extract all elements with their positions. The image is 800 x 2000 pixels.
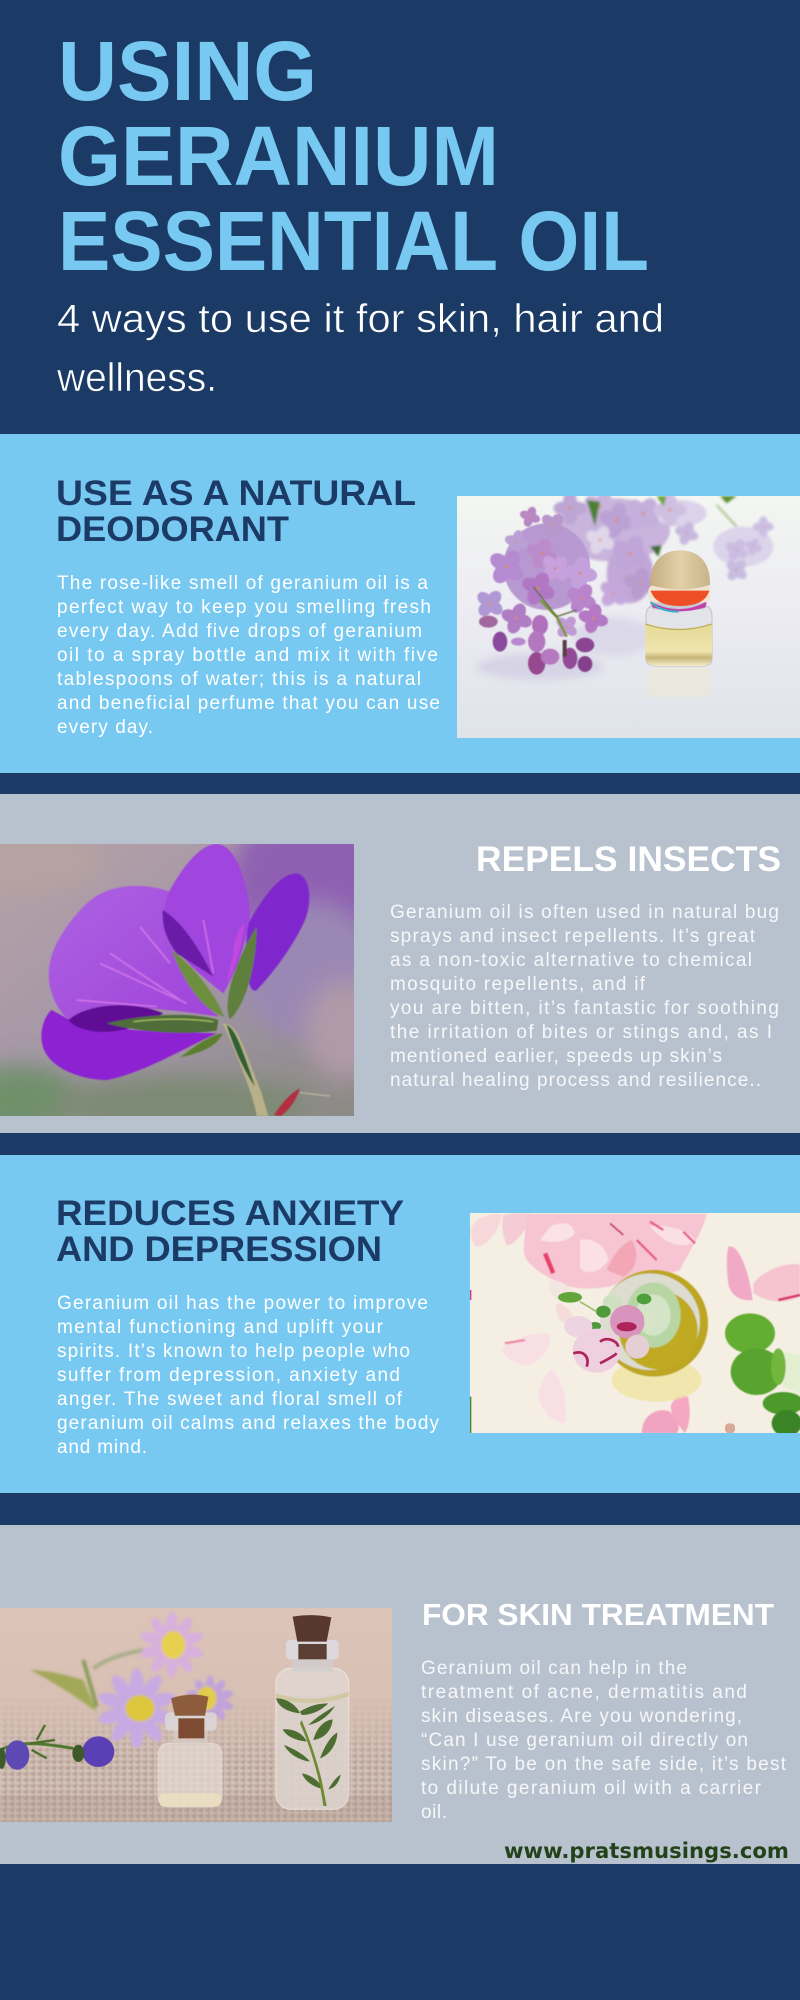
- text block: skin body: Geranium oil can help in the: [421, 1658, 687, 1679]
- text block: deodorant body: perfect way to keep you smelling fresh: [57, 597, 431, 618]
- icon: large bottle with herb: [276, 1615, 349, 1809]
- title: [58, 24, 649, 288]
- heading: for skin treatment: FOR SKIN TREATMENT: [422, 1597, 774, 1632]
- text block: insects body: the irritation of bites or stings and, as I: [390, 1022, 772, 1043]
- title: USING: [58, 24, 317, 118]
- heading: use as a natural deodorant: USE AS A NATURAL: [56, 474, 416, 513]
- text block: deodorant body: The rose-like smell of geranium oil is a: [57, 573, 428, 594]
- panel: for skin treatment: [0, 1525, 800, 1864]
- text block: skin body: skin diseases. Are you wondering,: [421, 1706, 742, 1727]
- heading: use as a natural deodorant: DEODORANT: [56, 510, 289, 549]
- text block: skin body: skin?” To be on the safe side, it’s best: [421, 1754, 787, 1775]
- title block: [56, 24, 664, 400]
- icon: oil bottle: [645, 550, 712, 697]
- text block: insects body: sprays and insect repellents. It’s great: [390, 926, 756, 947]
- title: GERANIUM: [58, 109, 499, 203]
- photo: lilac and oil bottle: [457, 484, 800, 738]
- text block: insects body: mentioned earlier, speeds up skin’s: [390, 1046, 722, 1067]
- text block: insects body: natural healing process and resilience..: [390, 1070, 761, 1091]
- photo: pink petals and oil jar: [470, 1213, 800, 1437]
- text block: insects body: as a non-toxic alternative to chemical: [390, 950, 752, 971]
- text block: anxiety body: anger. The sweet and floral smell of: [57, 1389, 403, 1410]
- panel: reduces anxiety and depression: [0, 1155, 800, 1493]
- heading: repels insects: REPELS INSECTS: [476, 840, 781, 879]
- text block: deodorant body: every day.: [57, 717, 153, 738]
- photo: glass bottles and flowers: [0, 1608, 392, 1822]
- text block: deodorant body: and beneficial perfume that you can use: [57, 693, 440, 714]
- text block: anxiety body: spirits. It’s known to help people who: [57, 1341, 410, 1362]
- text block: insects body: mosquito repellents, and if: [390, 974, 646, 995]
- text block: anxiety body: and mind.: [57, 1437, 147, 1458]
- text block: insects body: you are bitten, it’s fantastic for soothing: [390, 998, 779, 1019]
- text block: deodorant body: [57, 573, 440, 738]
- text block: anxiety body: [57, 1293, 440, 1458]
- text block: deodorant body: every day. Add five drops of geranium: [57, 621, 422, 642]
- text block: skin body: treatment of acne, dermatitis and: [421, 1682, 747, 1703]
- text block: anxiety body: Geranium oil has the power to improve: [57, 1293, 428, 1314]
- text block: deodorant body: tablespoons of water; this is a natural: [57, 669, 421, 690]
- text block: anxiety body: suffer from depression, anxiety and: [57, 1365, 400, 1386]
- panel: repels insects: [0, 794, 800, 1135]
- photo: purple geranium flower: [0, 844, 354, 1116]
- text block: skin body: [421, 1658, 787, 1823]
- text block: anxiety body: geranium oil calms and relaxes the body: [57, 1413, 440, 1434]
- subtitle: wellness.: [56, 356, 217, 400]
- text block: skin body: to dilute geranium oil with a carrier: [421, 1778, 762, 1799]
- heading: reduces anxiety and depression: REDUCES ANXIETY: [56, 1194, 404, 1233]
- title: ESSENTIAL OIL: [58, 194, 649, 288]
- text block: skin body: oil.: [421, 1802, 447, 1823]
- text block: insects body: Geranium oil is often used in natural bug: [390, 902, 779, 923]
- text block: insects body: [390, 902, 779, 1091]
- text block: skin body: “Can I use geranium oil directly on: [421, 1730, 748, 1751]
- website link: www.pratsmusings.com: [504, 1839, 789, 1863]
- text block: deodorant body: oil to a spray bottle and mix it with five: [57, 645, 438, 666]
- heading: use as a natural deodorant: [56, 474, 416, 549]
- subtitle: [56, 297, 664, 400]
- heading: reduces anxiety and depression: [56, 1194, 404, 1269]
- icon: small bottle: [158, 1695, 222, 1807]
- text block: anxiety body: mental functioning and uplift your: [57, 1317, 384, 1338]
- heading: reduces anxiety and depression: AND DEPRESSION: [56, 1230, 382, 1269]
- panel: natural deodorant: [0, 434, 800, 773]
- subtitle: 4 ways to use it for skin, hair and: [57, 297, 664, 341]
